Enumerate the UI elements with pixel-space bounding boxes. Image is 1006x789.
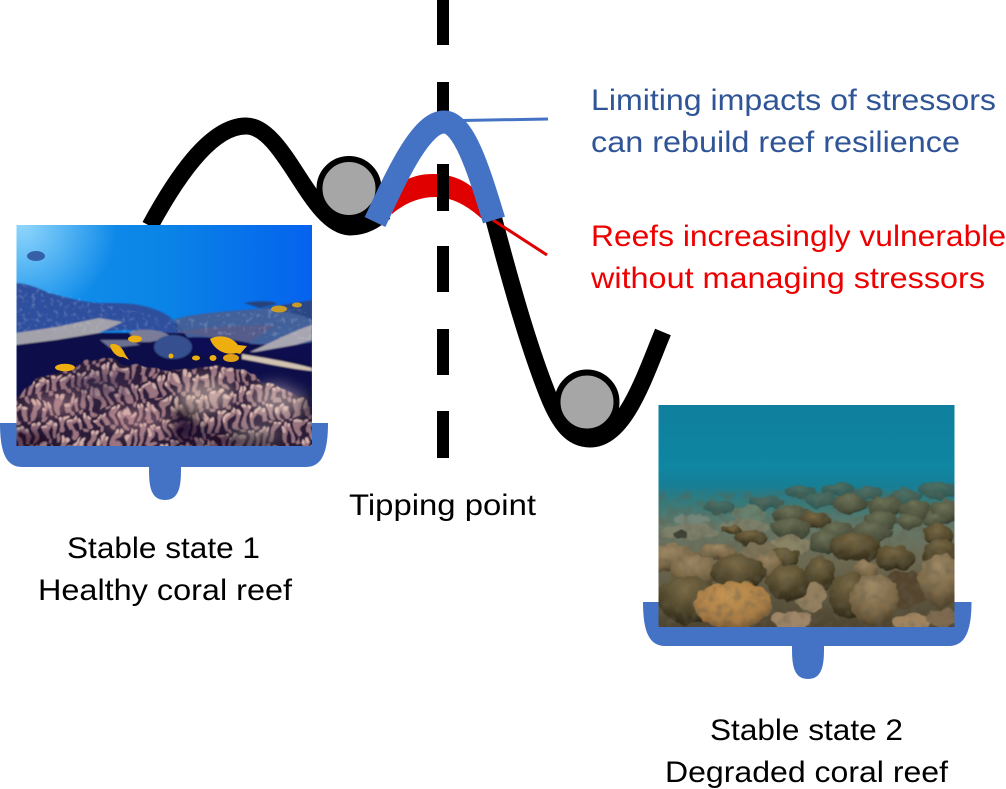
speckled texture on distant coral	[16, 283, 312, 340]
blue raised peak: rebuilt resilience	[375, 122, 494, 222]
photo: degraded coral reef	[643, 405, 963, 630]
label: blue message	[591, 84, 996, 159]
tray under degraded reef	[643, 602, 972, 679]
tipping point dashed line	[437, 0, 449, 458]
foreground coral	[16, 357, 312, 446]
reef texture	[658, 490, 954, 627]
ball in first valley	[320, 159, 378, 218]
tray under healthy reef	[0, 423, 328, 500]
label: stable state 2: Degraded coral reef	[665, 756, 949, 789]
label: red message: without managing stressors	[590, 262, 985, 295]
label: stable state 2	[665, 714, 949, 789]
label: blue message: can rebuild reef resilience	[591, 126, 960, 159]
dashed line segment over red peak	[437, 164, 449, 211]
yellow fish	[55, 302, 302, 371]
ball in second valley	[558, 372, 616, 432]
label: tipping point: Tipping point	[349, 489, 537, 522]
blue leader line	[462, 119, 548, 120]
label: stable state 1: Stable state 1	[67, 532, 260, 565]
red leader line	[493, 220, 547, 255]
label: red message: Reefs increasingly vulnerable	[591, 220, 1006, 253]
photo: healthy coral reef	[16, 225, 312, 446]
label: stable state 1	[38, 532, 293, 607]
rocks with irregular edges	[643, 481, 963, 630]
label: red message	[590, 220, 1006, 295]
red lowered peak: reduced resilience	[385, 174, 500, 219]
label: blue message: Limiting impacts of stressors	[591, 84, 996, 117]
landscape curve: left hill and first valley	[150, 126, 385, 227]
label: stable state 1: Healthy coral reef	[38, 574, 293, 607]
label: stable state 2: Stable state 2	[710, 714, 903, 747]
landscape curve: slope into second valley	[493, 216, 663, 439]
